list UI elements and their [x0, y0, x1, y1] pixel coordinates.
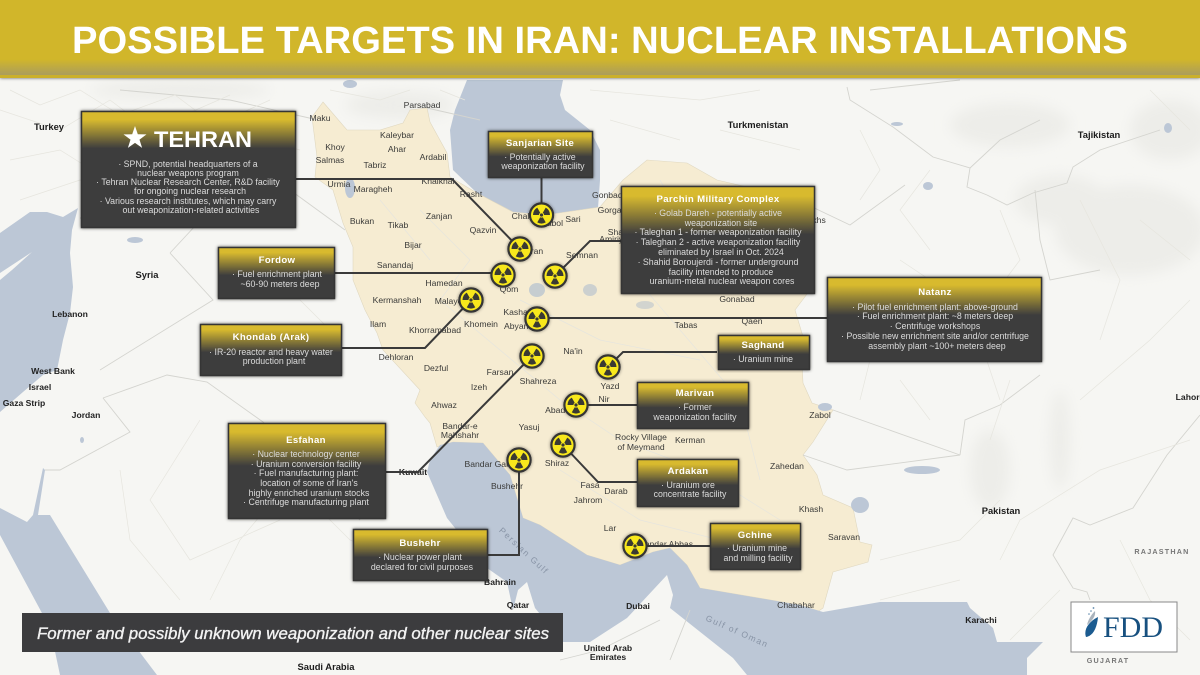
map labels: countries and regions: GUJARAT — [1087, 656, 1129, 665]
map labels: cities: Ardabil — [420, 152, 446, 162]
map labels: countries and regions: RAJASTHAN — [1134, 547, 1190, 556]
map labels: cities: Na'in — [563, 346, 583, 356]
map labels: cities: Izeh — [471, 382, 487, 392]
map labels: cities: Hamedan — [425, 278, 463, 288]
logo: FDD: FDD — [1103, 611, 1163, 644]
icon: radiation marker Natanz — [525, 307, 549, 331]
title: POSSIBLE TARGETS IN IRAN: NUCLEAR INSTALLATIONS — [72, 20, 1128, 62]
leader lines — [296, 178, 827, 555]
map labels: countries and regions: Turkey — [34, 121, 65, 132]
map labels: cities: Bandar-e — [442, 421, 478, 431]
map labels: countries and regions: Dubai — [626, 601, 650, 611]
water: Mediterranean — [0, 208, 78, 412]
map labels: cities: Dehloran — [379, 352, 414, 362]
panel: Natanz: Natanz — [918, 287, 952, 298]
map labels: cities: Kerman — [675, 435, 705, 445]
legend bar — [22, 613, 563, 652]
map labels: cities: Darab — [604, 486, 628, 496]
panel: Tehran: nuclear weapons program — [137, 168, 239, 178]
panel: Marivan: weaponization facility — [652, 412, 737, 422]
water: Caspian Sea — [450, 80, 600, 216]
map labels: cities: Ahar — [388, 144, 406, 154]
map labels: cities: Sari — [565, 214, 581, 224]
panel: Esfahan — [228, 424, 386, 518]
map labels: cities: Chalus — [512, 211, 538, 221]
map labels: cities — [309, 100, 860, 610]
map labels: cities: Khalkhal — [422, 176, 455, 186]
map labels: cities: Semnan — [566, 250, 598, 260]
map labels: cities: Mahshahr — [441, 430, 479, 440]
panel: Esfahan: Esfahan — [286, 435, 326, 446]
icon: feather — [1085, 607, 1098, 637]
terrain shading — [90, 80, 1200, 510]
map labels: cities: Chabahar — [777, 600, 815, 610]
panel: Fordow — [218, 248, 334, 298]
map labels: cities: Tehran — [517, 246, 543, 256]
map labels: cities: Zanjan — [426, 211, 452, 221]
panel: Natanz: assembly plant ~100+ meters deep — [868, 341, 1006, 351]
icon: radiation marker Fordow — [491, 263, 515, 287]
panel: Tehran: · Various research institutes, which may carry — [100, 196, 277, 206]
map labels: cities: Urmia — [328, 179, 351, 189]
panel: Ardakan: concentrate facility — [654, 489, 727, 499]
map labels: countries and regions: Gaza Strip — [3, 398, 45, 408]
map labels: countries and regions: United Arab — [584, 643, 632, 653]
map labels: cities: Qaen — [741, 316, 763, 326]
panel: Sanjarian Site: · Potentially active — [504, 152, 576, 162]
map labels: cities: Tabriz — [364, 160, 386, 170]
panel: Parchin Military Complex: · Taleghan 1 - former weaponization facility — [634, 227, 802, 237]
panel: Sanjarian Site: weaponization facility — [500, 161, 585, 171]
map labels: countries and regions: Emirates — [590, 652, 626, 662]
icon: radiation marker Esfahan — [520, 344, 544, 368]
panel: Bushehr — [354, 530, 488, 580]
water: Red Sea — [0, 468, 157, 675]
panel: Parchin Military Complex: Parchin Military Complex — [656, 194, 780, 205]
panel: Esfahan: · Fuel manufacturing plant: — [254, 468, 358, 478]
panel: Tehran: for ongoing nuclear research — [134, 186, 246, 196]
panel: Natanz — [828, 278, 1042, 362]
map labels: cities: Bandar Abbas — [639, 539, 693, 549]
map labels: cities: Kashan — [503, 307, 533, 317]
map labels: cities: Kaleybar — [380, 130, 414, 140]
panel: Natanz: · Fuel enrichment plant: ~8 meters deep — [857, 311, 1013, 321]
panel: Gchine: Gchine — [738, 530, 772, 541]
map labels: countries and regions: Lebanon — [52, 309, 88, 319]
map labels: countries and regions: Persian Gulf — [497, 525, 551, 576]
map labels: cities: Zahedan — [770, 461, 804, 471]
panel: Tehran: · SPND, potential headquarters of a — [118, 159, 258, 169]
icon: radiation marker Parchin — [543, 264, 567, 288]
map labels: cities: Bushehr — [491, 481, 523, 491]
panel: Bushehr: Bushehr — [399, 538, 441, 549]
panel: Khondab (Arak) — [200, 324, 342, 376]
map labels: cities: Salmas — [316, 155, 344, 165]
panel: Marivan — [638, 382, 748, 428]
panel: Sanjarian Site: Sanjarian Site — [506, 138, 574, 149]
panel: Esfahan: location of some of Iran's — [260, 478, 358, 488]
panel: Natanz: · Centrifuge workshops — [890, 321, 981, 331]
map labels: cities: Khash — [799, 504, 823, 514]
panel: Saghand: Saghand — [742, 340, 784, 351]
panel: Esfahan: · Uranium conversion facility — [251, 459, 362, 469]
water: Persian Gulf and Gulf of Oman — [427, 442, 1043, 675]
map labels: cities: Ahwaz — [431, 400, 457, 410]
icon: radiation marker Gchine — [623, 534, 647, 558]
map labels: cities: Kermanshah — [373, 295, 422, 305]
map labels: cities: Shahreza — [520, 376, 557, 386]
panel: Parchin Military Complex: facility intended to produce — [669, 267, 773, 277]
panel: Tehran: TEHRAN — [154, 127, 252, 152]
panel: Natanz: · Pilot fuel enrichment plant: above-ground — [852, 302, 1018, 312]
panel: Esfahan: highly enriched uranium stocks — [249, 488, 370, 498]
panel: Saghand — [718, 336, 810, 370]
map labels: cities: Khorramabad — [409, 325, 461, 335]
map labels: cities: Rocky Village — [615, 432, 667, 442]
panel: Gchine: · Uranium mine — [727, 543, 787, 553]
Iran — [312, 102, 872, 612]
panel: Fordow: Fordow — [259, 255, 296, 266]
map labels: cities: Amiriyeh — [599, 234, 633, 244]
panel: Saghand: · Uranium mine — [733, 354, 793, 364]
panel: Parchin Military Complex — [622, 186, 814, 294]
panel: Parchin Military Complex: uranium-metal nuclear weapon cores — [650, 276, 795, 286]
panel: Parchin Military Complex: · Taleghan 2 - active weaponization facility — [636, 237, 801, 247]
panel: Parchin Military Complex: eliminated by Israel in Oct. 2024 — [658, 247, 784, 257]
map labels: countries and regions: Syria — [136, 269, 159, 280]
map labels: cities: Dezful — [424, 363, 448, 373]
map labels: cities: Jahrom — [574, 495, 602, 505]
map labels: cities: Rasht — [460, 189, 483, 199]
map labels: cities: Yazd — [601, 381, 620, 391]
map labels: countries and regions: Israel — [29, 382, 51, 392]
map labels: countries and regions: Pakistan — [982, 505, 1021, 516]
panel: Gchine: and milling facility — [724, 553, 793, 563]
panel: Tehran: out weaponization-related activities — [123, 205, 260, 215]
panel: Khondab (Arak): Khondab (Arak) — [233, 332, 309, 343]
map labels: cities: Tikab — [388, 220, 409, 230]
panel: Khondab (Arak): · IR-20 reactor and heavy water — [209, 347, 333, 357]
icon: radiation marker Tehran — [508, 237, 532, 261]
panel: Ardakan: Ardakan — [668, 466, 708, 477]
map labels: countries and regions: Karachi — [965, 615, 997, 625]
logo: FDD — [1071, 602, 1177, 652]
map labels: cities: Maragheh — [354, 184, 393, 194]
map labels: cities: Shiraz — [545, 458, 569, 468]
icon: radiation marker Saghand — [596, 355, 620, 379]
panel: Fordow: · Fuel enrichment plant — [232, 269, 323, 279]
map labels: countries and regions: Saudi Arabia — [298, 661, 355, 672]
map labels: cities: Khomein — [464, 319, 498, 329]
map labels: cities: Qom — [500, 284, 518, 294]
map labels: cities: Khoy — [325, 142, 345, 152]
panel: Marivan: · Former — [678, 402, 712, 412]
legend bar: Former and possibly unknown weaponization and other nuclear sites — [37, 625, 549, 643]
map labels: cities: Zabol — [809, 410, 831, 420]
map labels: countries and regions: Kuwait — [399, 467, 427, 477]
map labels: cities: Lar — [604, 523, 616, 533]
map labels: cities: Saravan — [828, 532, 860, 542]
map labels: countries and regions: Jordan — [72, 410, 100, 420]
panel: Parchin Military Complex: · Golab Dareh - potentially active — [654, 208, 782, 218]
map labels: cities: Sarakhs — [794, 215, 826, 225]
map labels: cities: Malayer — [435, 296, 465, 306]
panel: Tehran: · Tehran Nuclear Research Center, R&D facility — [96, 177, 280, 187]
panel: Esfahan: · Nuclear technology center — [252, 449, 360, 459]
icon: radiation marker Sanjarian — [530, 203, 553, 227]
map labels: cities: Fasa — [580, 480, 600, 490]
lakes — [80, 80, 1172, 513]
map labels: cities: Tabas — [675, 320, 697, 330]
map labels: cities: Nir — [599, 394, 610, 404]
map labels: cities: Shahrud — [608, 227, 640, 237]
panel: Marivan: Marivan — [676, 388, 714, 399]
map labels: cities: Ilam — [370, 319, 386, 329]
panel: Ardakan — [638, 460, 738, 506]
icon: star — [124, 126, 146, 148]
panel: Bushehr: declared for civil purposes — [371, 562, 474, 572]
map labels: cities: Bandar Ganaveh — [465, 459, 530, 469]
map labels: cities: Gonabad — [719, 294, 755, 304]
map labels: cities: Sanandaj — [377, 260, 413, 270]
map labels: cities: Qazvin — [470, 225, 497, 235]
icon: radiation marker Marivan — [564, 393, 588, 417]
panel: Parchin Military Complex: · Shahid Boroujerdi - former underground — [638, 257, 799, 267]
map labels: cities: Babol — [541, 218, 563, 228]
map labels: countries and regions: Tajikistan — [1078, 129, 1121, 140]
icon: radiation marker Bushehr — [507, 448, 531, 472]
icon: radiation marker Khondab — [459, 288, 483, 312]
header banner — [0, 0, 1200, 78]
map labels: countries and regions: West Bank — [31, 366, 75, 376]
map labels: cities: Maku — [309, 113, 331, 123]
panel: Khondab (Arak): production plant — [243, 356, 306, 366]
map labels: cities: Yasuj — [519, 422, 540, 432]
map labels: countries and regions: Qatar — [507, 600, 530, 610]
panel: Esfahan: · Centrifuge manufacturing plant — [243, 497, 369, 507]
panel: Gchine — [710, 524, 800, 570]
map labels: cities: of Meymand — [617, 442, 665, 452]
map labels: countries and regions: Turkmenistan — [728, 119, 789, 130]
map labels: countries and regions: Gulf of Oman — [704, 613, 770, 650]
map labels: cities: Gorgan — [598, 205, 627, 215]
panel: Sanjarian Site — [488, 132, 592, 178]
map labels: cities: Gonbad-e Qabus — [592, 190, 658, 200]
map labels: countries and regions: Bahrain — [484, 577, 516, 587]
map labels: cities: Parsabad — [404, 100, 441, 110]
map labels: cities: Bukan — [350, 216, 374, 226]
map labels: cities: Abadeh — [545, 405, 575, 415]
icon: radiation marker Ardakan — [551, 433, 575, 457]
panel: Parchin Military Complex: weaponization site — [684, 218, 757, 228]
panel: Fordow: ~60-90 meters deep — [241, 279, 320, 289]
map labels: cities: Abyaneh — [504, 321, 538, 331]
panel: Natanz: · Possible new enrichment site and/or centrifuge — [841, 331, 1029, 341]
panel: Bushehr: · Nuclear power plant — [378, 552, 462, 562]
panel: Tehran — [82, 112, 296, 228]
panel: Ardakan: · Uranium ore — [661, 480, 715, 490]
map labels: cities: Bijar — [404, 240, 422, 250]
map labels: cities: Farsan — [487, 367, 514, 377]
